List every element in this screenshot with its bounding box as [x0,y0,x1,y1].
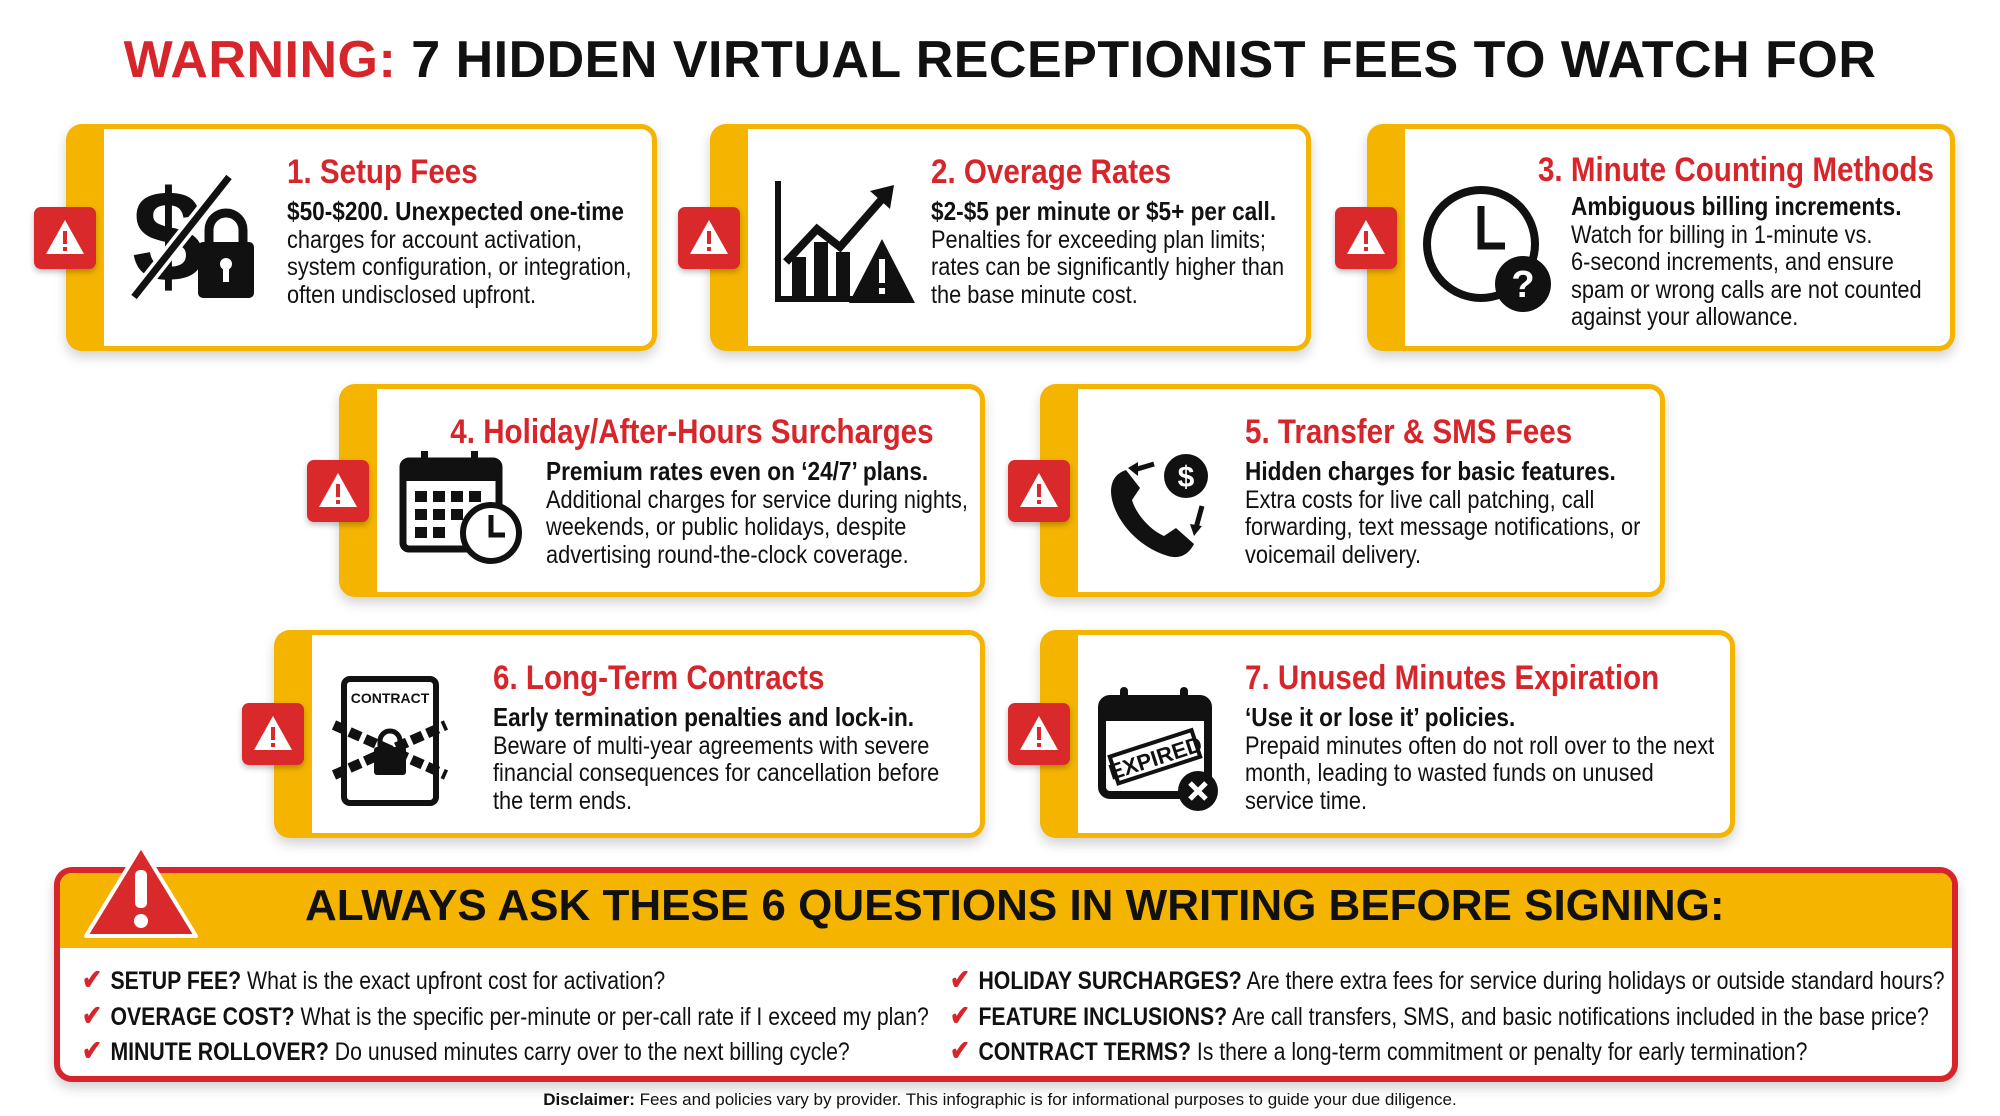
text: transfer [1245,413,1640,568]
text: overage rates: $2-$5 per minute or $5+ per call. [931,196,1276,226]
panel: holiday surcharges [339,384,985,597]
text: contracts: the term ends. [493,786,632,814]
heading band: ALWAYS ASK THESE 6 QUESTIONS IN WRITING BEFORE SIGNING: [305,881,1725,930]
icon: warning badge [1008,460,1070,522]
icon: big warning triangle [84,850,198,938]
icon: warning badge [1335,206,1397,268]
icon: expired calendar [1098,687,1218,811]
text: setup fees [287,153,632,308]
text: unused: month, leading to wasted funds on unused [1245,759,1654,787]
text: setup fees: often undisclosed upfront. [287,280,536,308]
text: holiday: Additional charges for service during nights, [546,486,968,514]
disclaimer: Disclaimer: Fees and policies vary by provider. This infographic is for informational purposes to guide your due diligence. [543,1090,1457,1109]
icon: dollar lock [131,169,254,309]
text: contracts: Early termination penalties and lock-in. [493,702,914,732]
text: holiday: Premium rates even on ‘24/7’ plans. [546,456,928,486]
questions right: ✔ HOLIDAY SURCHARGES? Are there extra fees for service during holidays or outside standard hours? [950,964,1945,995]
panel: transfer & sms [1040,384,1665,597]
text: overage rates [931,153,1284,308]
panel: unused minutes [1040,630,1735,838]
icon: calendar clock [400,451,522,564]
panel: minute counting [1367,124,1955,351]
text: minute counting: 6-second increments, and ensure [1571,248,1894,276]
text: unused: Prepaid minutes often do not roll over to the next [1245,732,1714,760]
icon: expired calendar: EXPIRED [1106,731,1205,785]
text: minute counting: Watch for billing in 1-minute vs. [1571,220,1872,248]
text: holiday: weekends, or public holidays, despite [546,513,906,541]
text: contracts: financial consequences for cancellation before [493,759,939,787]
panel: overage rates [710,124,1311,351]
text: unused: 7. Unused Minutes Expiration [1245,659,1659,697]
text: minute counting [1538,151,1934,331]
icon: phone dollar [1111,454,1208,558]
text: minute counting: Ambiguous billing increments. [1571,191,1902,221]
text: transfer: Extra costs for live call patching, call [1245,486,1594,514]
text: contracts: 6. Long-Term Contracts [493,659,824,697]
text: holiday: 4. Holiday/After-Hours Surcharges [450,413,934,451]
text: minute counting: spam or wrong calls are not counted [1571,276,1922,304]
text: minute counting: 3. Minute Counting Methods [1538,151,1934,189]
text: setup fees: charges for account activation, [287,226,582,254]
panel: long-term contracts [274,630,985,838]
text: overage rates: the base minute cost. [931,280,1138,308]
questions right [950,964,1945,1066]
heading band [60,873,1952,948]
icon: clock question: ? [1511,264,1535,306]
text: transfer: 5. Transfer & SMS Fees [1245,413,1572,451]
text: setup fees: system configuration, or integration, [287,253,632,281]
text: unused: service time. [1245,786,1367,814]
text: transfer: Hidden charges for basic features. [1245,456,1616,486]
questions left: ✔ OVERAGE COST? What is the specific per-minute or per-call rate if I exceed my plan? [82,1000,929,1030]
icon: warning badge [307,460,369,522]
title: WARNING: 7 HIDDEN VIRTUAL RECEPTIONIST FEES TO WATCH FOR [124,31,1876,89]
questions left: ✔ SETUP FEE? What is the exact upfront cost for activation? [82,964,665,995]
icon: warning badge [34,206,96,268]
text: holiday [450,413,968,568]
text: overage rates: Penalties for exceeding plan limits; [931,226,1266,254]
icon: warning badge [1008,703,1070,765]
questions right: ✔ FEATURE INCLUSIONS? Are call transfers, SMS, and basic notifications included in the base price? [950,1000,1929,1030]
text: contracts [493,659,939,814]
text: minute counting: against your allowance. [1571,303,1798,331]
questions left [82,964,929,1066]
text: unused: ‘Use it or lose it’ policies. [1245,702,1515,732]
text: setup fees: 1. Setup Fees [287,153,478,191]
icon: clock question [1423,186,1551,312]
text: overage rates: 2. Overage Rates [931,153,1171,191]
icon: warning badge [242,703,304,765]
icon: chart with warning [775,181,915,303]
panel: questions [54,867,1958,1082]
text: contracts: Beware of multi-year agreements with severe [493,732,929,760]
panel: setup fees [66,124,657,351]
text: overage rates: rates can be significantly higher than [931,253,1284,281]
questions left: ✔ MINUTE ROLLOVER? Do unused minutes carry over to the next billing cycle? [82,1035,850,1066]
icon: phone dollar: $ [1178,461,1195,494]
text: transfer: forwarding, text message notifications, or [1245,513,1640,541]
icon: chained contract: CONTRACT [351,690,430,706]
text: setup fees: $50-$200. Unexpected one-time [287,196,624,226]
text: unused [1245,659,1714,814]
questions right: ✔ CONTRACT TERMS? Is there a long-term commitment or penalty for early termination? [950,1035,1807,1066]
text: transfer: voicemail delivery. [1245,540,1421,568]
icon: chained contract [332,676,448,806]
text: holiday: advertising round-the-clock coverage. [546,540,909,568]
icon: warning badge [678,206,740,268]
